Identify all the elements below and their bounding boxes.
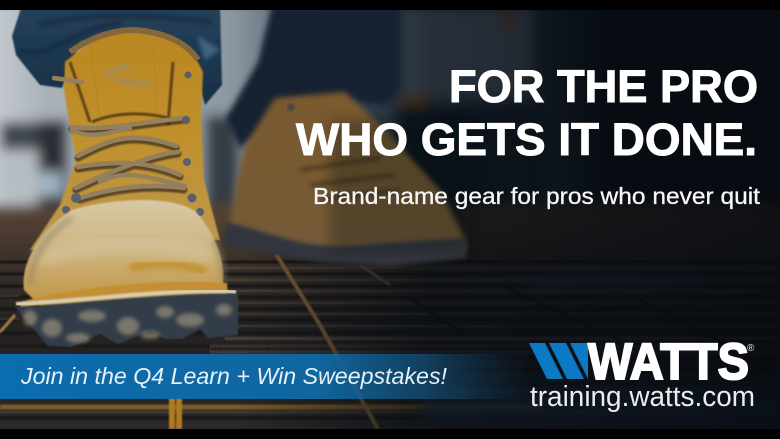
promo band — [0, 354, 530, 399]
headline: FOR THE PRO — [449, 61, 758, 112]
back boot upper — [228, 92, 466, 250]
registered mark: ® — [747, 343, 755, 354]
rust bars — [0, 254, 780, 429]
collar edge — [70, 30, 198, 60]
dark gradient over right side — [250, 10, 780, 429]
headline — [296, 61, 758, 165]
back boot sole — [224, 222, 466, 266]
tongue shadow lines — [70, 62, 173, 125]
back boot — [224, 5, 470, 266]
scuff speckle on toe — [30, 218, 222, 285]
icon: blue stripes — [529, 343, 588, 379]
website url: training.watts.com — [530, 381, 755, 413]
welt edge — [16, 291, 236, 304]
wordmark: WATTS — [588, 333, 749, 390]
boot upper — [30, 28, 220, 250]
lace shadows — [72, 120, 186, 200]
front boot — [0, 5, 238, 350]
promo text: Join in the Q4 Learn + Win Sweepstakes! — [20, 363, 447, 389]
toe cap — [24, 200, 223, 306]
laces — [54, 78, 186, 198]
front jeans — [12, 5, 222, 105]
back jeans — [226, 5, 400, 148]
welt band — [20, 282, 228, 308]
sole — [15, 294, 238, 347]
subheading: Brand-name gear for pros who never quit — [313, 183, 761, 209]
headline: WHO GETS IT DONE. — [296, 114, 757, 165]
eyelets — [62, 72, 204, 216]
WATTS logo — [529, 333, 755, 390]
